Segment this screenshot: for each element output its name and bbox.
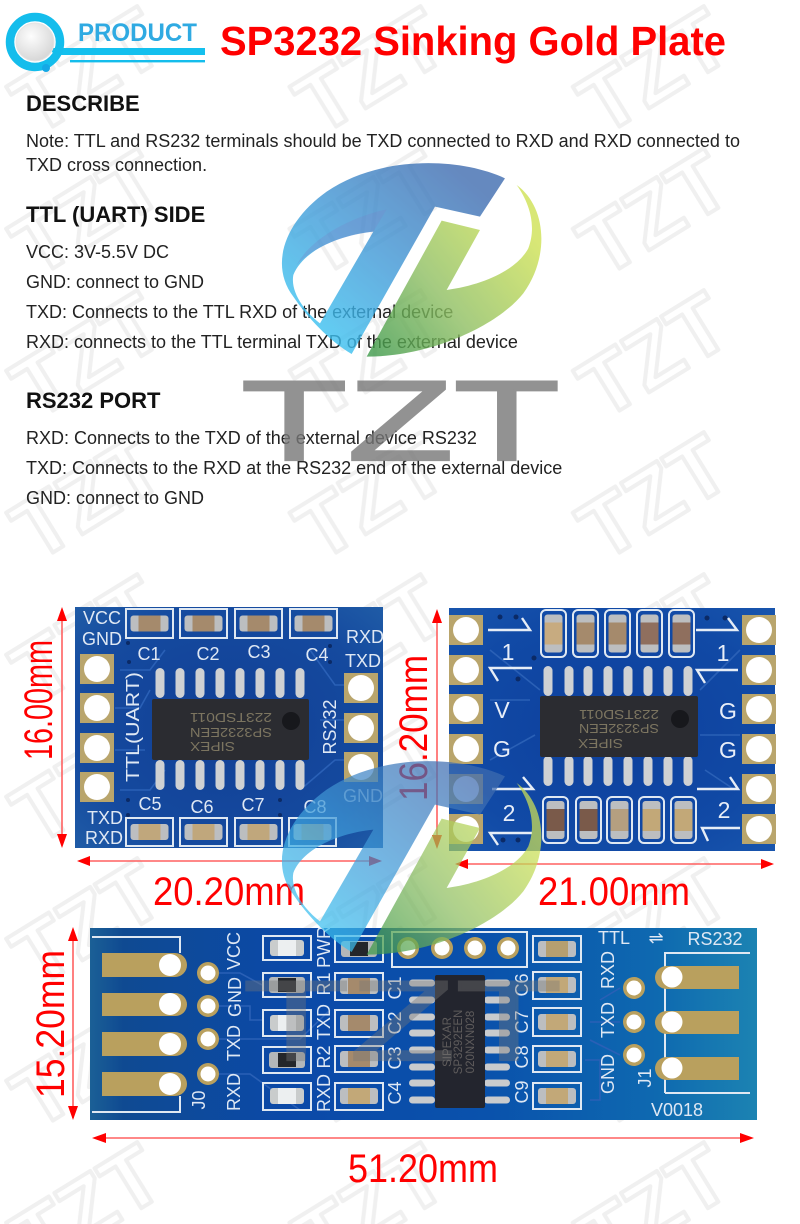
- silkscreen labels: C6: [190, 797, 214, 817]
- silkscreen labels: C1: [385, 976, 405, 1000]
- component column 1: [263, 936, 311, 1110]
- text block: RS232 pins: GND: connect to GND: [26, 488, 204, 508]
- chip SP3232: 020NXN028: [465, 1011, 477, 1073]
- outlines: [92, 932, 750, 1112]
- logo: TZT watermark lower: [243, 761, 562, 1085]
- heading: describe: DESCRIBE: [26, 91, 140, 116]
- silkscreen labels: TXD: [224, 1025, 244, 1061]
- chip SP3232: SP3292EEN: [453, 1010, 465, 1074]
- logo: TZT watermark upper: [241, 163, 560, 485]
- silkscreen labels: GND: [225, 977, 245, 1017]
- silkscreen labels: C3: [247, 642, 271, 662]
- silkscreen labels: TTL: [598, 928, 630, 948]
- title: SP3232 Sinking Gold Plate: [220, 18, 726, 64]
- chip pins: [409, 980, 510, 1104]
- dimension: 16.00mm: 16.00mm: [17, 640, 61, 760]
- chip SP3232: [540, 696, 698, 757]
- silkscreen labels: [493, 639, 737, 826]
- silkscreen labels: C4: [385, 1081, 405, 1105]
- capacitors bottom: [543, 797, 696, 843]
- heading: TTL side: TTL (UART) SIDE: [26, 202, 205, 227]
- silkscreen labels: TTL(UART): [123, 672, 143, 782]
- silkscreen labels: VCC: [224, 932, 244, 970]
- capacitors bottom: [126, 818, 336, 846]
- chip SP3232: 223TSD011: [190, 710, 272, 725]
- silkscreen labels: C5: [138, 794, 162, 814]
- silkscreen labels: RS232: [687, 929, 743, 949]
- right gold fingers: [655, 966, 739, 1080]
- chip SP3232: SP3232EEN: [190, 725, 272, 740]
- silkscreen labels: G: [719, 737, 737, 763]
- text block: RS232 pins: RXD: Connects to the TXD of the external device RS232: [26, 428, 477, 448]
- through-hole pads: [197, 937, 645, 1085]
- silkscreen labels: C9: [512, 1080, 532, 1104]
- silkscreen labels: GND: [598, 1054, 618, 1094]
- heading: RS232 port: RS232 PORT: [26, 388, 161, 413]
- right header pads: [344, 673, 378, 782]
- capacitors top: [126, 609, 337, 638]
- silkscreen labels: ⇌: [648, 928, 664, 948]
- chip SP3232: [435, 975, 485, 1108]
- capacitors top: [541, 610, 694, 657]
- panel: board 2 RS232 bottom view: [449, 608, 776, 851]
- silkscreen labels: C8: [303, 797, 327, 817]
- dimension: 20.20mm: 20.20mm: [153, 870, 305, 914]
- silkscreen labels: 1: [717, 640, 729, 666]
- text block: RS232 pins: TXD: Connects to the RXD at the RS232 end of the external device: [26, 458, 562, 478]
- silkscreen labels: RXD: [598, 951, 618, 989]
- silkscreen labels: TXD: [87, 808, 123, 828]
- dimension: 16.20mm: 16.20mm: [392, 655, 436, 801]
- right header pads: [742, 615, 776, 844]
- silkscreen labels: V: [494, 697, 510, 723]
- silkscreen labels: G: [493, 736, 511, 762]
- text block: TTL pins: [26, 242, 518, 352]
- chip SP3232: SIPEX: [190, 739, 235, 754]
- chip SP3232: SIPEX: [578, 736, 623, 751]
- logo: TZT watermark upper: TZT: [241, 358, 560, 485]
- component column 3: [533, 936, 581, 1109]
- silkscreen labels: C2: [196, 644, 220, 664]
- dimension: 51.20mm: [92, 1133, 754, 1191]
- logo: TZT watermark lower: TZT: [243, 958, 562, 1085]
- silkscreen labels: [189, 926, 743, 1120]
- silkscreen labels: PWR: [314, 926, 334, 968]
- dimension: 21.00mm: [455, 859, 774, 914]
- silkscreen labels: TXD: [598, 1002, 618, 1038]
- icon: product badge: PRODUCT: [78, 19, 197, 47]
- chip SP3232: [152, 699, 309, 760]
- silkscreen labels: 2: [718, 797, 730, 823]
- chip pins: [544, 666, 692, 786]
- icon: product badge: [10, 17, 205, 72]
- silkscreen labels: R1: [314, 972, 334, 996]
- silkscreen labels: RXD: [314, 1074, 334, 1112]
- silkscreen labels: J0: [189, 1090, 209, 1110]
- text block: TTL pins: VCC: 3V-5.5V DC: [26, 242, 169, 262]
- left header pads: [449, 615, 483, 844]
- left header pads: [80, 654, 114, 802]
- text block: note: TXD cross connection.: [26, 155, 207, 175]
- chip SP3232: 223TSD011: [579, 707, 659, 722]
- silkscreen labels: G: [719, 698, 737, 724]
- dimension: 16.00mm: [17, 607, 67, 848]
- silkscreen labels: TXD: [314, 1004, 334, 1040]
- text block: TTL pins: RXD: connects to the TTL terminal TXD of the external device: [26, 332, 518, 352]
- component column 2: [335, 936, 383, 1110]
- silkscreen labels: C6: [512, 973, 532, 997]
- silkscreen labels: C7: [512, 1010, 532, 1034]
- silkscreen labels: 1: [502, 639, 514, 665]
- silkscreen labels: C7: [241, 795, 265, 815]
- dimension: 21.00mm: 21.00mm: [538, 870, 690, 914]
- silkscreen labels: J1: [635, 1068, 655, 1088]
- silkscreen labels: TXD: [345, 651, 381, 671]
- silkscreen labels: C1: [137, 644, 161, 664]
- silkscreen labels: C2: [385, 1011, 405, 1035]
- silkscreen labels: RXD: [85, 828, 123, 848]
- text block: TTL pins: TXD: Connects to the TTL RXD of the external device: [26, 302, 453, 322]
- silkscreen labels: VCC: [83, 608, 121, 628]
- silkscreen labels: GND: [82, 629, 122, 649]
- silkscreen labels: GND: [343, 786, 383, 806]
- silkscreen labels: C8: [512, 1045, 532, 1069]
- text block: TTL pins: GND: connect to GND: [26, 272, 204, 292]
- silkscreen labels: RXD: [346, 627, 384, 647]
- text block: note: Note: TTL and RS232 terminals should be TXD connected to RXD and RXD connected to: [26, 131, 740, 151]
- chip SP3232: SIPEXAR: [442, 1017, 454, 1067]
- silkscreen labels: RXD: [224, 1073, 244, 1111]
- text block: RS232 pins: [26, 428, 562, 508]
- text block: note: [26, 131, 740, 175]
- silkscreen labels: C4: [305, 645, 329, 665]
- silkscreen labels: [82, 608, 384, 848]
- panel: board 3 long adapter: [90, 926, 757, 1120]
- silkscreen arrows: [488, 618, 740, 845]
- silkscreen labels: V0018: [651, 1100, 703, 1120]
- silkscreen labels: RS232: [320, 699, 340, 755]
- dimension: 51.20mm: 51.20mm: [348, 1147, 498, 1191]
- panel: board 1 TTL top view: [75, 607, 384, 848]
- silkscreen labels: 2: [503, 800, 515, 826]
- silkscreen labels: R2: [314, 1045, 334, 1069]
- dimension: 15.20mm: 15.20mm: [29, 950, 73, 1098]
- chip pins: [156, 668, 304, 790]
- chip SP3232: SP3232EEN: [579, 721, 659, 736]
- dimension: 20.20mm: [77, 856, 382, 914]
- left gold fingers: [102, 953, 187, 1096]
- silkscreen labels: C3: [385, 1046, 405, 1070]
- dimension: 16.20mm: [392, 609, 442, 849]
